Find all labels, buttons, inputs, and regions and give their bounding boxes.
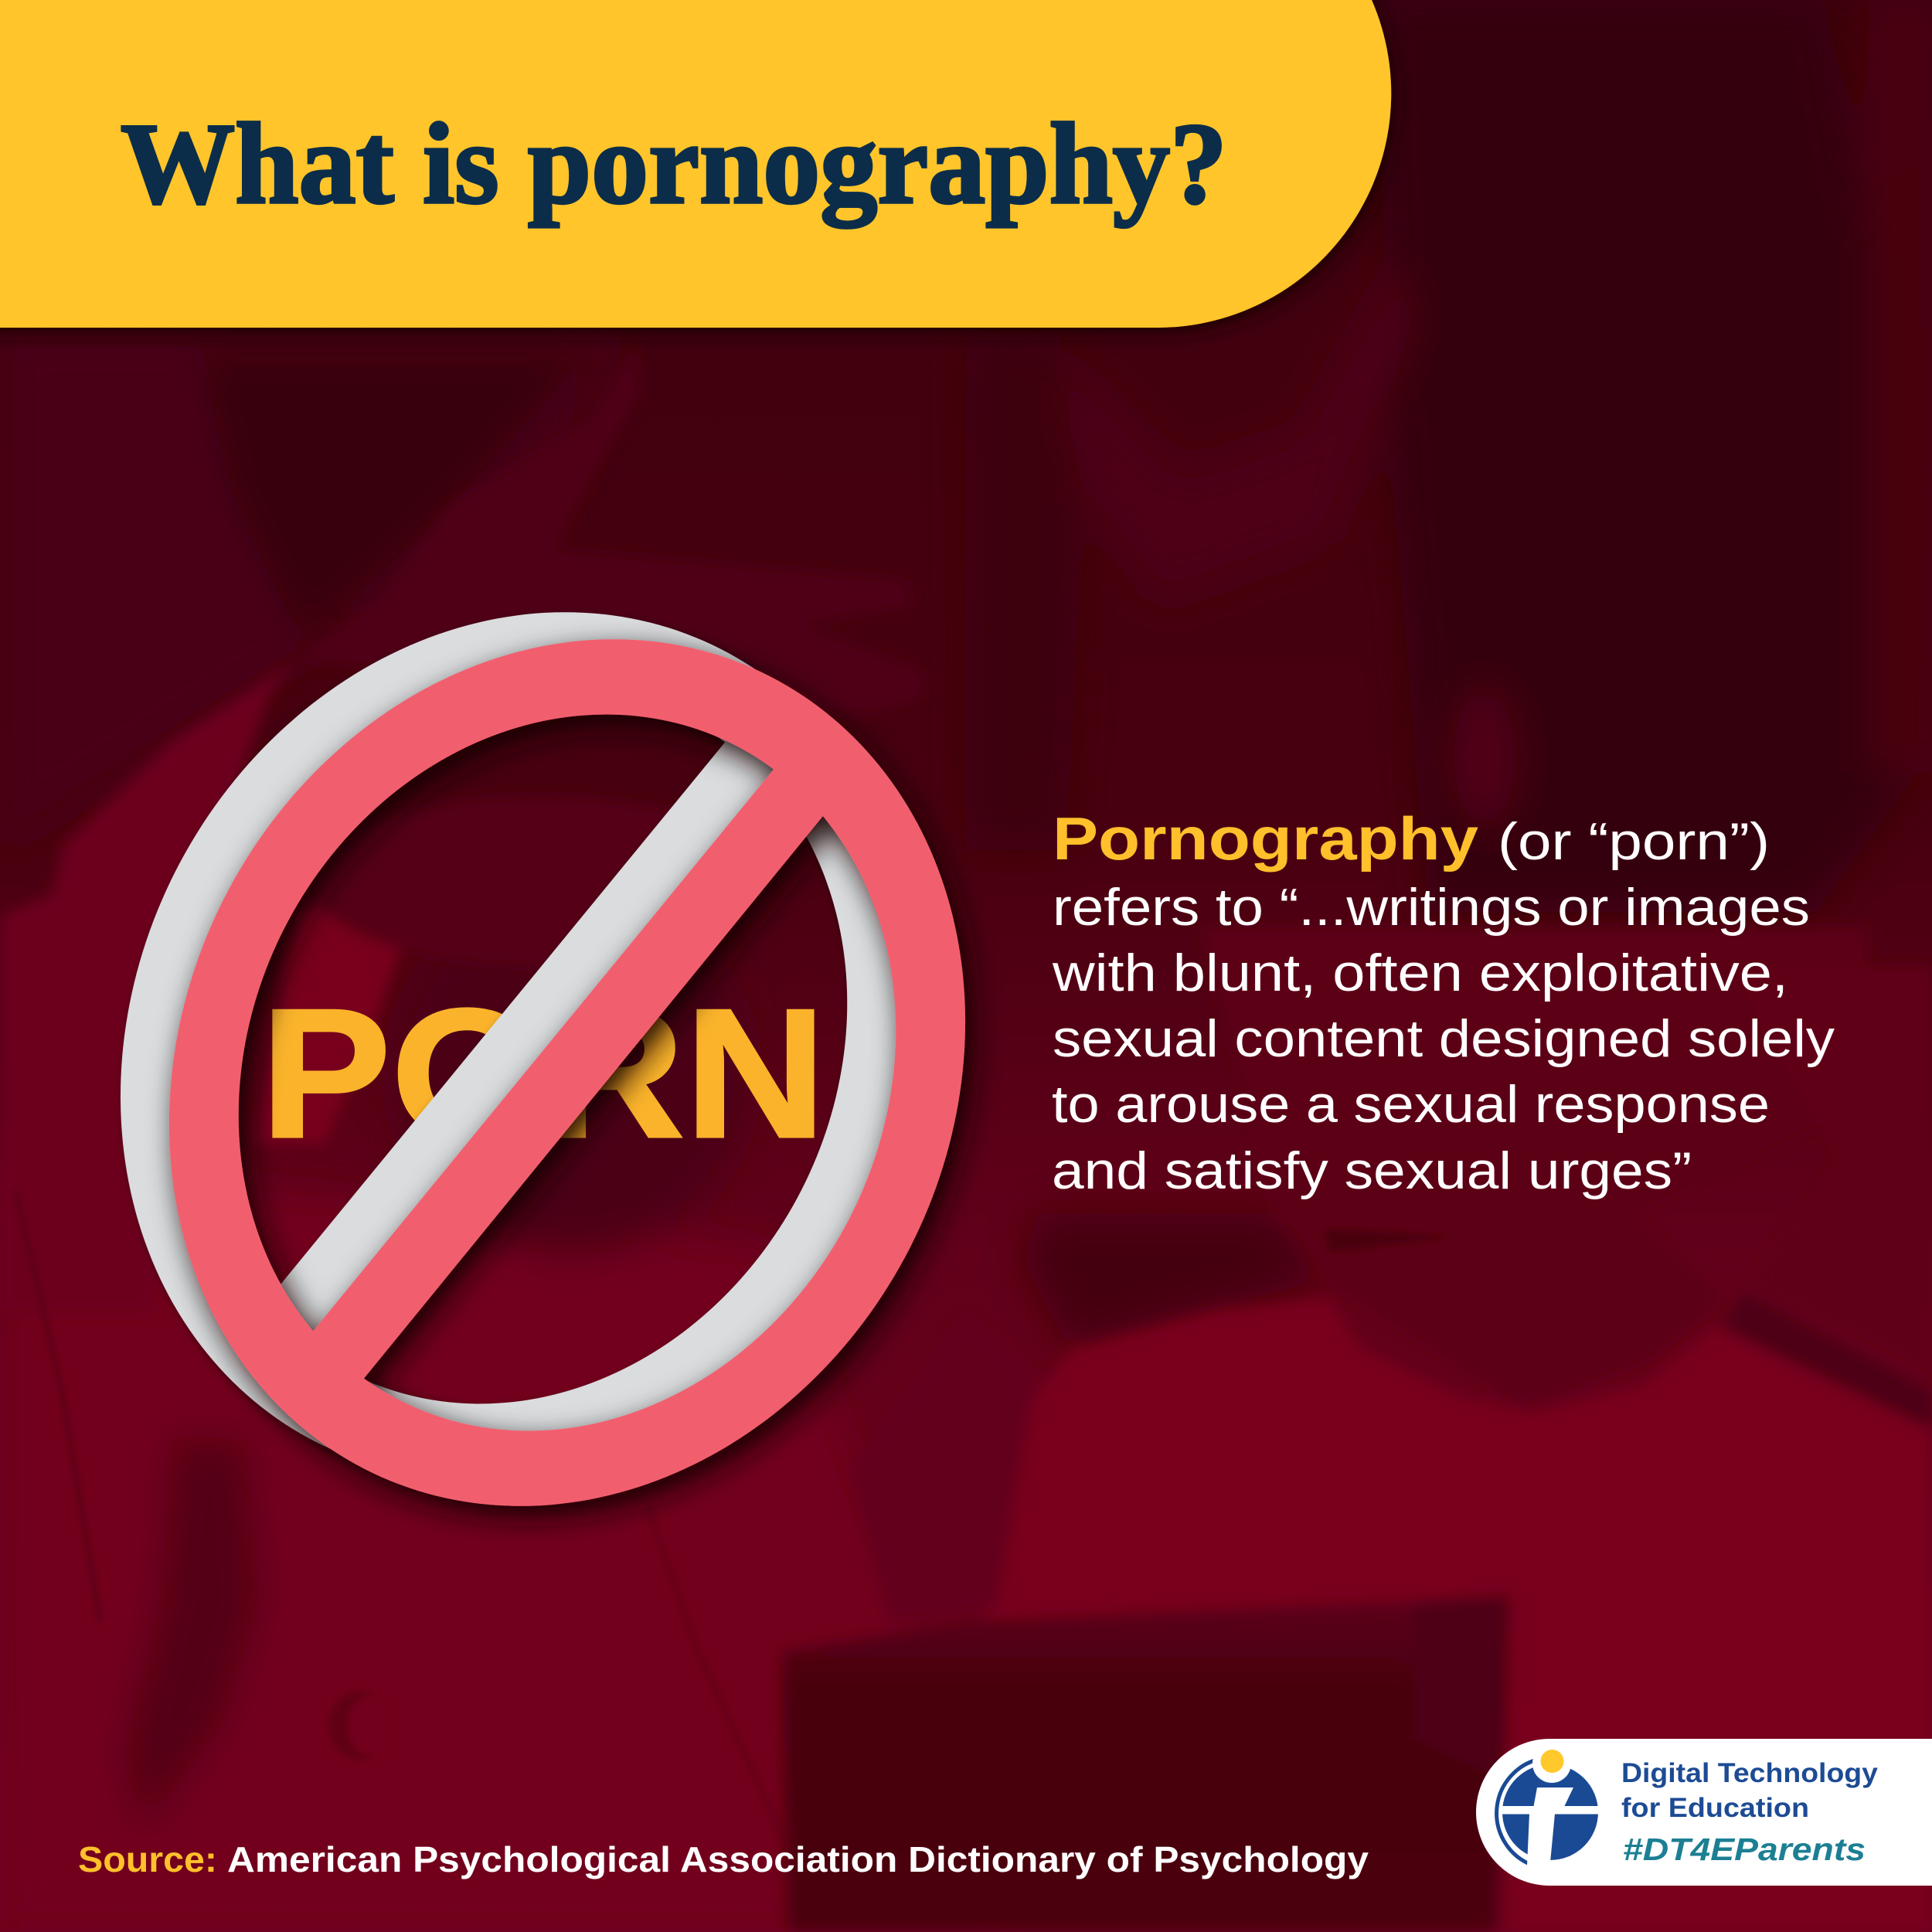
definition text: sexual content designed solely [1053,1009,1835,1068]
title: What is pornography? [121,100,1227,228]
definition text [1052,804,1835,1200]
definition text: (or “porn”) [1498,812,1770,871]
icon: DT4E i logo [1497,1744,1601,1866]
sign front layer, pink [22,502,1112,1644]
definition text: and satisfy sexual urges” [1052,1141,1692,1200]
button [328,1692,390,1760]
tablet [782,1596,1511,1932]
definition text: Pornography [1053,804,1478,872]
definition text: with blunt, often exploitative, [1052,944,1788,1002]
organisation name and hashtag [1621,1758,1879,1867]
left sleeve [0,660,296,1314]
sign back layer, grey [0,474,1063,1617]
no-entry sign over the word PORN [0,474,1112,1644]
organisation name and hashtag: Digital Technology [1621,1758,1879,1788]
hand shape [296,346,924,716]
lower left shirt [0,1159,1028,1932]
banner shape [0,0,1391,328]
face region [1200,927,1870,1406]
definition text: to arouse a sexual response [1052,1075,1770,1134]
source line: Source: [78,1839,217,1879]
organisation name and hashtag: #DT4EParents [1623,1832,1866,1867]
logo pill [1476,1739,1932,1886]
title banner [0,0,1391,328]
source line: American Psychological Association Dictionary of Psychology [227,1839,1369,1879]
word PORN: PORN [260,971,826,1176]
soft shirt folds [124,1435,259,1835]
right shirt [985,1298,1932,1932]
organisation name and hashtag: for Education [1621,1793,1809,1823]
definition text: refers to “...writings or images [1053,878,1810,937]
neck area behind the sign [255,900,417,1144]
